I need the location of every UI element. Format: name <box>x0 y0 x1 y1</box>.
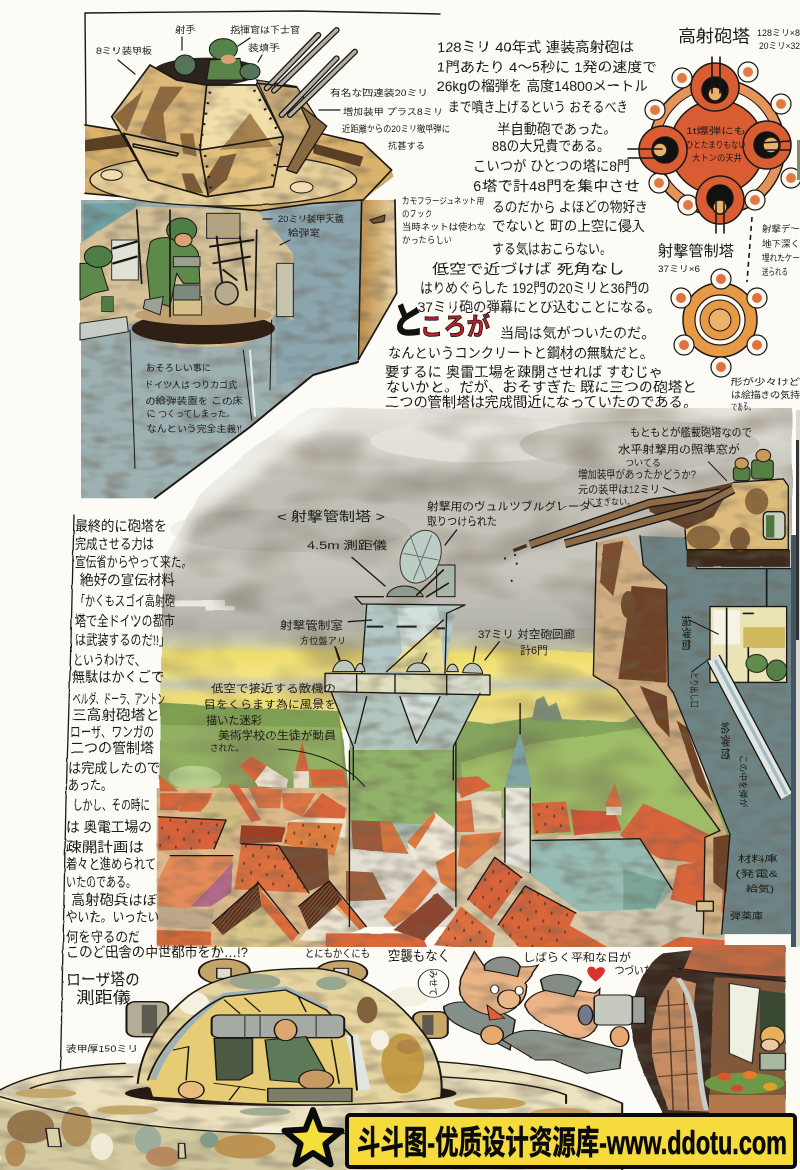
blue-grey interior <box>640 536 792 934</box>
diagram: fire control tower plan: 射撃管制塔 <box>658 242 734 260</box>
pig soldier one <box>444 952 538 1050</box>
main text block: なんというコンクリートと鋼材の無駄だと。 <box>388 345 653 361</box>
turret labels: 射手 <box>175 24 196 35</box>
tower notes: (発電& <box>736 868 778 879</box>
side note: shape: 形が少々けど <box>731 376 800 387</box>
control tower lower stem <box>349 687 456 927</box>
diagram: flak tower plan <box>628 27 800 233</box>
crew on top <box>733 449 773 481</box>
tower labels: 低空で接近する敵機の <box>211 682 336 695</box>
turret labels: なんという完全主義!! <box>147 423 242 434</box>
arrow: labels to turret <box>118 37 340 245</box>
main text block: 要するに 奥雷工場を疎開させれば すむじゃ <box>385 364 663 380</box>
heading: ところが: と <box>392 300 424 341</box>
main text block: まで噴き上げるという おそるべき <box>448 99 628 115</box>
bottom scene: captions <box>305 947 653 977</box>
left column text: は完成したので <box>68 760 160 776</box>
turret labels: 有名な四連装20ミリ <box>330 87 428 98</box>
tower notes: この中を弾が <box>738 755 749 807</box>
main text block: 低空で近づけば 死角なし <box>432 261 625 277</box>
side note: cable: 送られる <box>762 266 788 277</box>
tan camouflage wall <box>593 536 727 934</box>
small gun tubs <box>645 62 800 215</box>
left column text: 装甲厚150ミリ <box>66 1043 138 1054</box>
blue-grey tower wall <box>81 200 362 498</box>
tower labels: 描いた迷彩 <box>206 713 262 727</box>
diagram: flak tower plan: 1t爆弾にも <box>686 125 746 136</box>
icon: gun turret platform and turret <box>85 30 393 211</box>
left column text: 塔で全ドイツの都市 <box>75 613 175 629</box>
flak burst dots <box>505 555 517 581</box>
turret labels: カモフラージュネット用 <box>402 196 484 206</box>
main text block: るのだから よほどの物好き <box>492 199 648 215</box>
left column text: ローザ塔の <box>66 971 140 989</box>
main text block: 128ミリ 40年式 連装高射砲は <box>437 39 634 55</box>
left column text: 「かくもスゴイ高射砲 <box>75 593 175 609</box>
left column text: は武装するのだ!!」 <box>75 632 170 648</box>
watermark banner <box>347 1115 795 1167</box>
diagram: fire control tower plan <box>658 242 767 377</box>
soldier left <box>80 246 113 312</box>
turret labels: 指揮官は下士官 <box>230 24 300 35</box>
diagram: flak tower plan: 高射砲塔 <box>678 27 750 46</box>
four main gun turrets <box>639 63 791 224</box>
left column text: やいた。いったい <box>66 909 159 925</box>
camouflage roofs painted on tower <box>351 820 409 854</box>
frame line <box>85 11 440 125</box>
turret labels: 当時ネットは使わな <box>402 221 486 232</box>
tower labels: 4.5m 測距儀 <box>307 538 387 552</box>
ammunition room interior <box>80 207 293 468</box>
right gutter shadow <box>791 140 800 947</box>
turret labels: ドイツ人は つりカゴ式 <box>145 379 237 390</box>
bottom scene: captions: しばらく平和な日が <box>523 950 631 964</box>
left column text: 二つの管制塔 <box>70 740 154 756</box>
heading: ところが: ころが <box>420 312 490 341</box>
left column text <box>60 515 248 1093</box>
margin line <box>60 515 74 1093</box>
tower notes: 増加装甲があったかどうか? <box>578 467 696 481</box>
tower notes: とり出し口 <box>689 672 700 708</box>
main text block <box>385 39 697 410</box>
turret labels: 増加装甲 プラス8ミリ <box>343 106 443 117</box>
tower notes <box>578 425 778 921</box>
turret labels: 抗甚する <box>388 140 425 151</box>
main text block: 1門あたり 4〜5秒に 1発の速度で <box>437 59 657 75</box>
side optics <box>126 1002 448 1038</box>
feed tube <box>713 658 787 796</box>
left column text: ベルダ、ドーラ、アントン <box>73 691 165 707</box>
side note: shape <box>731 376 800 412</box>
tan outer wall <box>358 200 397 360</box>
turret labels: に つくってしまった。 <box>147 409 235 419</box>
diagram: flak tower plan: 大トンの天井 <box>692 152 742 163</box>
panel: upper tower cross-section <box>80 11 486 498</box>
main text block: 6塔で計48門を集中させ <box>473 178 640 194</box>
main text block: ないかと。だが、おそすぎた 既に三つの砲塔と <box>386 379 697 395</box>
left column text: 三高射砲塔と <box>72 707 160 723</box>
tower labels: < 射撃管制塔 > <box>277 509 385 524</box>
turret labels: 20ミリ装甲天蓋 <box>278 213 344 224</box>
tower labels: 射撃用のヴュルツブルグレーダー <box>427 499 603 513</box>
tower labels: 計6門 <box>520 643 548 657</box>
heading: ところが <box>392 300 490 341</box>
icon: heart <box>587 967 605 982</box>
white lower band <box>0 947 800 1170</box>
main text block: はりめぐらした 192門の20ミリと36門の <box>420 280 650 296</box>
soldier <box>143 218 200 315</box>
left column text: 疎開計画は <box>66 839 144 855</box>
bottom scene: captions: とにもかくにも <box>305 947 370 960</box>
turret labels: かったらしい <box>402 235 452 245</box>
turret armour <box>112 65 283 197</box>
diagonal cut-away edge <box>155 362 358 498</box>
side note: cable: 地下深く <box>762 238 800 249</box>
tower notes: 材料庫 <box>738 853 778 864</box>
tower labels: 方位盤アリ <box>300 635 346 646</box>
tower labels: された。 <box>210 743 244 753</box>
left column text: というわけで、 <box>73 652 145 668</box>
side note: cable: 射撃デー <box>762 223 800 234</box>
diagram: fire control tower plan: 37ミリ×6 <box>658 264 700 274</box>
tower labels: 37ミリ 対空砲回廊 <box>478 627 575 641</box>
tower labels: 目をくらます為に風景を <box>204 697 336 711</box>
left column text: 高射砲兵はぼ <box>71 892 157 908</box>
gun tower right <box>505 449 792 934</box>
tower labels: 射撃管制室 <box>280 618 343 632</box>
bottom scene: captions: 空襲もなく <box>388 948 450 964</box>
diagram: flak tower plan: ひとたまりもない <box>686 140 746 150</box>
turret <box>647 479 790 567</box>
main text block: でないと 町の上空に侵入 <box>492 218 645 234</box>
left column text: 無駄はかくごで <box>72 669 164 685</box>
town scene <box>157 687 725 950</box>
main text block: 二つの管制塔は完成間近になっていたのである。 <box>385 394 697 410</box>
bottom scene: house, pigs, dome <box>0 945 785 1170</box>
turret crew <box>153 58 260 86</box>
left column text: は 奥電工場の <box>66 819 152 835</box>
tower notes: 給気) <box>746 883 774 894</box>
speech bubble <box>418 969 449 997</box>
speech bubble text: みせて <box>428 970 438 996</box>
side note: shape: は絵描きの気持 <box>731 389 800 400</box>
tower notes: 給弾筒 <box>720 722 731 760</box>
tower notes: もともとが艦載砲塔なので <box>630 425 752 439</box>
tower labels: 取りつけられた <box>427 515 497 528</box>
house at right <box>631 945 785 1115</box>
turret labels: 8ミリ装甲板 <box>96 45 152 56</box>
tower notes: 元の装甲は12ミリ <box>578 483 660 496</box>
interior machinery marks <box>173 997 339 1100</box>
crew <box>178 1019 352 1102</box>
right town <box>464 791 502 829</box>
left column text: いたのである。 <box>66 874 136 890</box>
turret back and shield <box>257 80 320 167</box>
rangefinder dome <box>387 586 423 597</box>
left column text: ローザ、ワンガの <box>70 724 154 740</box>
roof window marks <box>158 802 576 950</box>
dashed cable line <box>747 217 752 282</box>
icon: base disc of tower <box>0 1062 622 1170</box>
left column text: 宣伝省からやって来た。 <box>75 554 192 570</box>
flower box <box>705 1071 785 1115</box>
left column text: あった。 <box>68 777 112 793</box>
icon: gun barrels <box>513 489 733 551</box>
left column text: 最終的に砲塔を <box>75 518 167 534</box>
cut-away opening <box>148 990 357 1103</box>
turret labels: おそろしい事に <box>146 362 211 373</box>
tower notes: 弾薬庫 <box>730 910 763 921</box>
tower notes: ついてる <box>625 458 661 468</box>
arrows <box>335 530 499 660</box>
left column text: 着々と進められて <box>66 856 156 872</box>
far town base <box>157 788 349 950</box>
sky edge fade <box>155 405 345 570</box>
tower labels <box>204 499 603 753</box>
main text block: 当局は気がついたのだ。 <box>500 325 655 341</box>
gun tubs on gallery <box>333 660 483 673</box>
main text block: こいつが ひとつの塔に8門 <box>473 158 630 174</box>
hoist room <box>710 569 787 682</box>
watermark star <box>284 1110 342 1164</box>
main text block: 37ミリ砲の弾幕にとび込むことになる。 <box>418 299 660 315</box>
left column text: 完成させる力は <box>75 536 154 552</box>
tower notes: にすぎない。 <box>587 496 635 507</box>
side note: cable <box>762 223 800 277</box>
turret labels: のフック <box>402 209 432 219</box>
left column text: しかし、その時に <box>73 797 150 813</box>
bottom scene: captions: つづいた <box>615 964 653 977</box>
turret labels: 近距離からの20ミリ徹甲弾に <box>342 123 450 134</box>
left column text: 何を守るのだ <box>66 929 140 945</box>
turret labels <box>96 24 486 434</box>
left column text: 絶好の宣伝材料 <box>80 572 175 588</box>
tower labels: 美術学校の生徒が動員 <box>218 728 336 742</box>
diagram: flak tower plan: 128ミリ×8 <box>757 28 800 38</box>
main text block: 88の大兄貴である。 <box>492 138 610 154</box>
tower notes: 揚弾筒 <box>681 615 692 651</box>
left column text: 測距儀 <box>76 989 131 1007</box>
turret labels: 装填手 <box>248 42 280 53</box>
side note: shape: である。 <box>731 402 755 412</box>
main text block: 26kgの榴弾を 高度14800メートル <box>437 78 648 94</box>
icon: rangefinder dome <box>125 959 456 1106</box>
left column text: このど田舎の中世都市をか…!? <box>66 944 248 960</box>
icon: Wurzburg radar dish <box>392 524 449 589</box>
top lugs <box>199 959 367 985</box>
rangefinder tube <box>212 1015 344 1038</box>
turret labels: 給弾室 <box>288 227 320 238</box>
distant green hills <box>160 696 740 840</box>
control tower upper <box>325 524 499 780</box>
main text block: する気はおこらない。 <box>492 241 612 257</box>
quad 20 mm gun barrels <box>267 30 355 115</box>
turret labels: の給弾装置を この床 <box>145 395 243 406</box>
pig soldier two with binoculars <box>481 975 645 1073</box>
tower notes: 水平射撃用の照準窓が <box>618 442 740 456</box>
main text block: 半自動砲であった。 <box>497 121 617 137</box>
sky wash panel <box>160 408 792 730</box>
